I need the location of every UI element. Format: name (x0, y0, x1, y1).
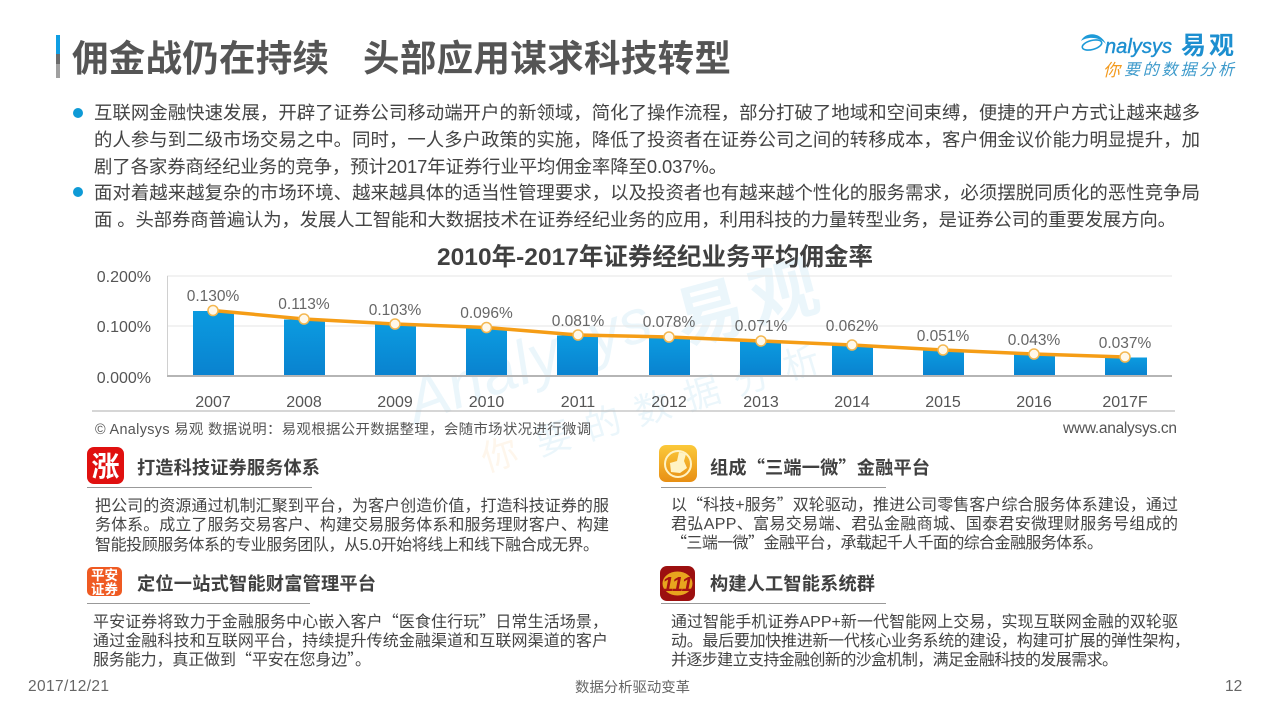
value labels: 0.081% (552, 313, 604, 330)
value labels: 0.043% (1008, 332, 1060, 349)
value labels: 0.096% (460, 305, 513, 322)
title: 佣金战仍在持续 (72, 38, 329, 79)
body text: 以“科技+服务”双轮驱动，推进公司零售客户综合服务体系建设，通过 (671, 491, 1178, 515)
x axis labels: 2010 (469, 394, 504, 411)
x axis labels: 2016 (1016, 394, 1052, 411)
x axis labels: 2007 (195, 394, 231, 411)
value labels: 0.037% (1099, 335, 1151, 352)
icon: Ping An Securities: 平安 (91, 567, 118, 583)
icon: Ping An Securities: 证券 (91, 581, 118, 597)
bullet text block: 互联网金融快速发展，开辟了证券公司移动端开户的新领域，简化了操作流程，部分打破了地域和空间束缚，便捷的开户方式让越来越多 (94, 102, 1200, 123)
body text (671, 491, 1178, 553)
x axis labels: 2013 (743, 394, 779, 411)
x axis labels: 2012 (651, 394, 687, 411)
bullet text block: 面 。头部券商普遍认为，发展人工智能和大数据技术在证券经纪业务的应用，利用科技的力量转型业务，是证券公司的重要发展方向。 (94, 209, 1176, 230)
body text (95, 497, 609, 554)
body text: 智能投顾服务体系的专业服务团队，从5.0开始将线上和线下融合成无界。 (95, 536, 599, 554)
body text: 动。最后要加快推进新一代核心业务系统的建设，构建可扩展的弹性架构， (671, 632, 1190, 650)
value labels: 0.062% (826, 318, 878, 335)
icon: red app: 涨 (91, 451, 120, 482)
trend line (213, 310, 1125, 357)
chart title: 2010年-2017年证券经纪业务平均佣金率 (437, 243, 873, 271)
title (72, 38, 731, 79)
x axis labels: 2015 (925, 394, 961, 411)
logo: Analysys: 易观 (1181, 32, 1234, 60)
watermark: 你 (476, 430, 523, 480)
chart: average commission rate (97, 269, 1172, 411)
x axis labels (195, 394, 1148, 411)
heading: 定位一站式智能财富管理平台 (137, 573, 376, 594)
icon: Ping An Securities (87, 567, 122, 597)
body text: “三端一微”金融平台，承载起千人千面的综合金融服务体系。 (671, 529, 1103, 553)
icon: red 111 app (660, 566, 695, 601)
y axis labels: 0.000% (97, 370, 151, 387)
heading: 组成“三端一微”金融平台 (710, 454, 930, 480)
chart source url: www.analysys.cn (1062, 420, 1177, 437)
icon: gold thumb app (659, 445, 697, 482)
body text: 君弘APP、富易交易端、君弘金融商城、国泰君安微理财服务号组成的 (671, 515, 1178, 533)
value labels: 0.103% (369, 302, 421, 319)
value labels: 0.113% (278, 296, 330, 313)
panel: 打造科技证券服务体系 (87, 447, 609, 554)
watermark: 要的数据分析 (530, 338, 824, 464)
value labels: 0.078% (643, 314, 695, 331)
body text (93, 608, 608, 670)
x axis labels: 2011 (561, 394, 595, 411)
footer slogan: 数据分析驱动变革 (575, 679, 690, 696)
x axis labels: 2017F (1102, 394, 1148, 411)
watermark: Analysys (393, 285, 660, 439)
bullet text block: 剧了各家券商经纪业务的竞争，预计2017年证券行业平均佣金率降至0.037%。 (94, 156, 727, 177)
icon: red app (87, 447, 124, 484)
body text: 务体系。成立了服务交易客户、构建交易服务体系和服务理财客户、构建 (95, 516, 609, 534)
value labels (187, 288, 1151, 352)
bullet 2 (73, 187, 83, 197)
page number: 12 (1225, 678, 1242, 695)
watermark (393, 249, 827, 480)
x axis labels: 2009 (377, 394, 413, 411)
bullet text block: 面对着越来越复杂的市场环境、越来越具体的适当性管理要求，以及投资者也有越来越个性化的服务需求，必须摆脱同质化的恶性竞争局 (94, 182, 1200, 203)
heading: 打造科技证券服务体系 (137, 457, 320, 478)
logo: Analysys (1081, 32, 1236, 80)
body text: 并逐步建立支持金融创新的沙盒机制，满足金融科技的发展需求。 (671, 651, 1118, 669)
heading: 构建人工智能系统群 (710, 573, 875, 594)
body text: 平安证券将致力于金融服务中心嵌入客户“医食住行玩”日常生活场景， (93, 608, 608, 632)
body text: 把公司的资源通过机制汇聚到平台，为客户创造价值，打造科技证券的服 (95, 497, 609, 515)
value labels: 0.071% (735, 318, 787, 335)
y axis labels: 0.100% (97, 319, 151, 336)
logo: Analysys: 要的数据分析 (1124, 61, 1236, 79)
logo: Analysys: nalysys (1105, 36, 1172, 58)
watermark: 易观 (667, 249, 827, 359)
bars (193, 311, 1147, 376)
x axis labels: 2008 (286, 394, 322, 411)
body text: 服务能力，真正做到“平安在您身边”。 (93, 646, 371, 670)
panel: 定位一站式智能财富管理平台 (87, 567, 608, 670)
logo: Analysys: 你 (1103, 61, 1123, 80)
panel: 组成“三端一微”金融平台 (659, 445, 1178, 553)
title accent bar (56, 35, 60, 78)
body text (671, 613, 1190, 669)
panel: 构建人工智能系统群 (660, 566, 1190, 669)
title: 头部应用谋求科技转型 (363, 38, 731, 79)
value labels: 0.130% (187, 288, 239, 305)
body text: 通过金融科技和互联网平台，持续提升传统金融渠道和互联网渠道的客户 (93, 632, 608, 650)
bullet text block: 的人参与到二级市场交易之中。同时，一人多户政策的实施，降低了投资者在证券公司之间的转移成本，客户佣金议价能力明显提升，加 (94, 129, 1200, 150)
bullet 1 (73, 108, 83, 118)
y axis labels: 0.200% (97, 269, 151, 286)
bullet text block (73, 102, 1200, 230)
footer date: 2017/12/21 (28, 678, 109, 695)
value labels: 0.051% (917, 328, 969, 345)
chart source note: © Analysys 易观 数据说明：易观根据公开数据整理，会随市场状况进行微调 (95, 421, 591, 438)
body text: 通过智能手机证券APP+新一代智能网上交易，实现互联网金融的双轮驱 (671, 613, 1178, 631)
icon: red 111 app: 111 (662, 574, 693, 596)
y axis labels (97, 269, 151, 387)
markers (208, 306, 1130, 362)
x axis labels: 2014 (834, 394, 870, 411)
